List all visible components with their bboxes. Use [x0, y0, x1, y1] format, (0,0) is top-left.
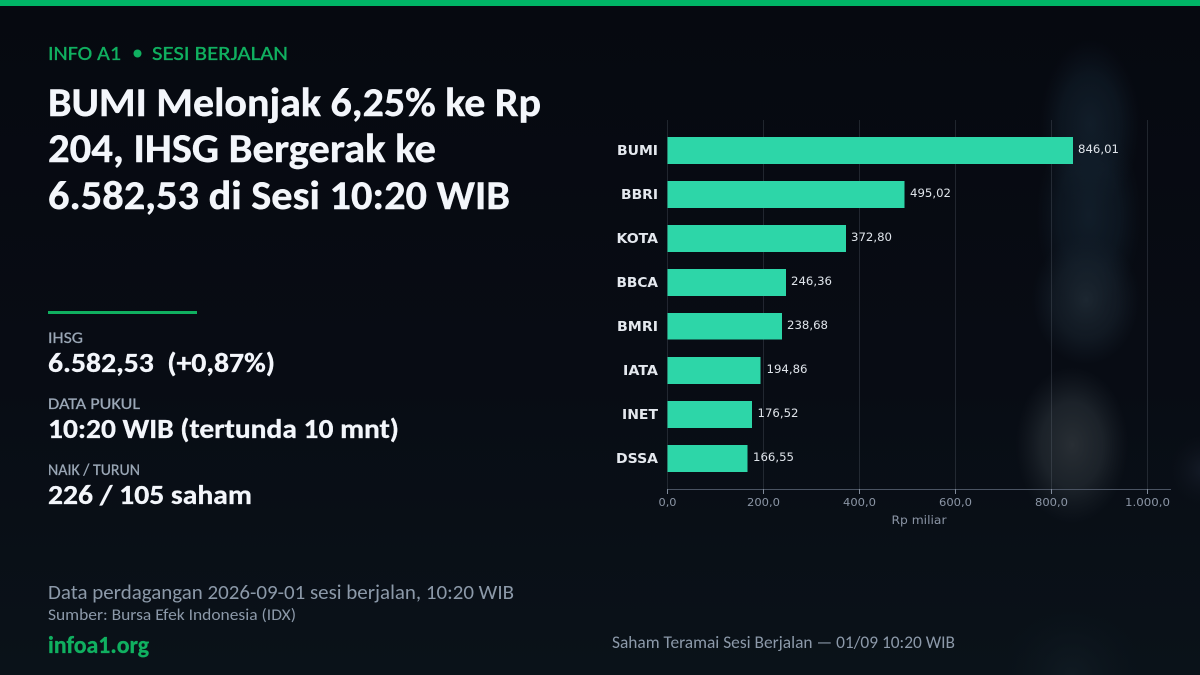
stat: naik turun — [48, 461, 252, 512]
stat: naik turun: NAIK / TURUN — [48, 461, 140, 480]
ticker labels: BBRI — [621, 187, 658, 203]
value labels: 166,55 — [753, 450, 794, 464]
stat: data pukul: DATA PUKUL — [48, 395, 140, 414]
value labels: 238,68 — [787, 318, 828, 332]
footer note: Data perdagangan 2026-09-01 sesi berjalan, 10:20 WIB — [48, 579, 514, 605]
x axis: 600,0 — [939, 496, 972, 509]
value labels: 372,80 — [851, 230, 892, 244]
value labels: 246,36 — [791, 274, 832, 288]
ticker labels: KOTA — [616, 231, 659, 247]
value labels: 194,86 — [766, 362, 808, 376]
stat: IHSG: IHSG — [48, 329, 83, 348]
stat: data pukul: 10:20 WIB (tertunda 10 mnt) — [48, 413, 399, 446]
title: BUMI Melonjak 6,25% ke Rp — [48, 78, 541, 127]
chart caption: Saham Teramai Sesi Berjalan — 01/09 10:20 WIB — [612, 632, 955, 653]
ticker labels: BBCA — [616, 275, 659, 291]
kicker — [48, 42, 288, 66]
title: 6.582,53 di Sesi 10:20 WIB — [48, 171, 510, 220]
stat: IHSG: 6.582,53 (+0,87%) — [48, 347, 275, 380]
ticker labels: BMRI — [617, 319, 658, 335]
kicker: INFO A1 — [48, 42, 121, 66]
bar chart — [616, 120, 1171, 527]
stat: IHSG — [48, 329, 275, 380]
ticker labels: DSSA — [616, 451, 659, 467]
x axis: 1.000,0 — [1125, 496, 1170, 509]
x axis — [658, 489, 1171, 527]
title: 204, IHSG Bergerak ke — [48, 124, 436, 173]
site link: infoa1.org — [48, 631, 150, 660]
top accent bar — [0, 0, 1200, 6]
ticker labels: INET — [622, 407, 659, 423]
value labels — [753, 142, 1119, 464]
footer note: Sumber: Bursa Efek Indonesia (IDX) — [48, 606, 296, 625]
ticker labels: IATA — [623, 363, 659, 379]
axis title: Rp miliar — [892, 513, 947, 527]
stat: naik turun: 226 / 105 saham — [48, 479, 252, 512]
x axis: 0,0 — [658, 496, 676, 509]
stat: data pukul — [48, 395, 399, 446]
value labels: 176,52 — [758, 406, 798, 420]
footer note — [48, 579, 514, 625]
bars — [668, 137, 1073, 472]
ticker labels — [616, 143, 659, 467]
x axis: 800,0 — [1035, 496, 1068, 509]
value labels: 846,01 — [1078, 142, 1119, 156]
value labels: 495,02 — [910, 186, 951, 200]
kicker: SESI BERJALAN — [152, 42, 288, 66]
ticker labels: BUMI — [617, 143, 658, 159]
x axis: 400,0 — [843, 496, 876, 509]
title — [48, 78, 541, 220]
x axis: 200,0 — [747, 496, 780, 509]
divider — [48, 311, 197, 314]
